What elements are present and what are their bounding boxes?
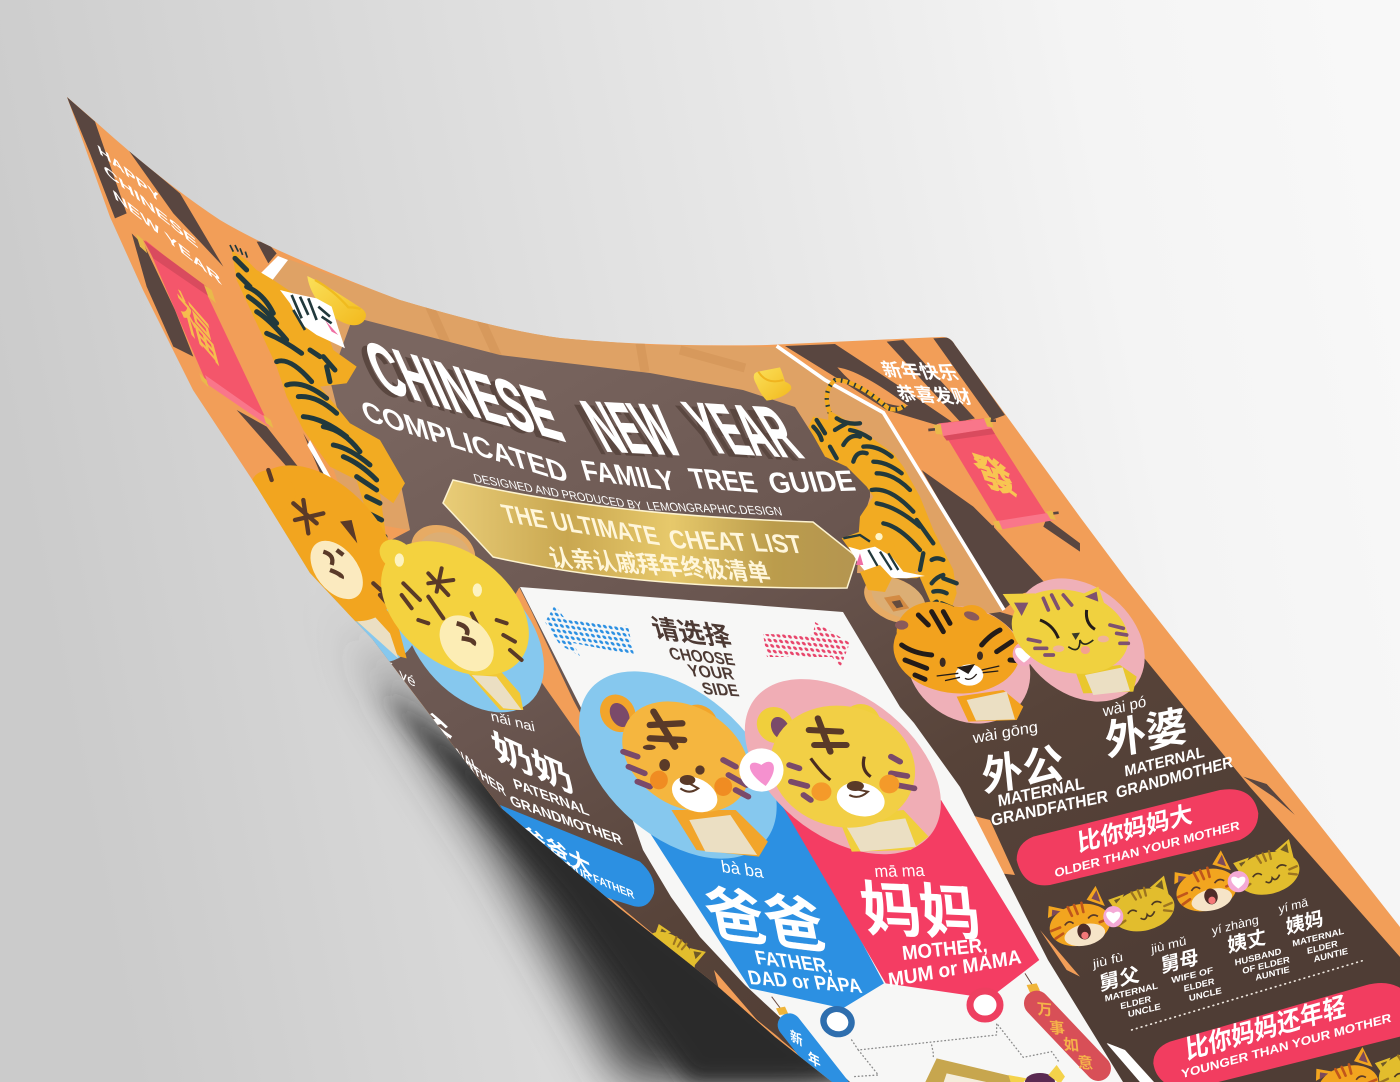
pill: older than your mother [1017, 789, 1258, 885]
small cat bottom left [636, 917, 708, 988]
red lantern: 意 [1077, 1052, 1094, 1073]
dotted connectors [852, 1023, 1060, 1077]
left tiger climbing [230, 245, 405, 553]
paternal grandmother text: 奶奶 [487, 726, 579, 803]
relative labels: AUNTIE [1313, 946, 1349, 964]
tiger face [842, 530, 925, 578]
centre white panel [520, 587, 1123, 1082]
red lantern [1025, 973, 1098, 1073]
wood frame panel [273, 258, 1002, 614]
title: YEAR [665, 390, 808, 476]
relative labels: 姨丈 [1227, 925, 1267, 958]
mother label: mā ma [874, 861, 926, 881]
red scroll fu: 福 [173, 280, 223, 374]
mother label: MUM or MAMA [887, 946, 1023, 992]
happy chinese new year: NEW YEAR [111, 186, 224, 289]
gold photo frame [920, 1058, 1033, 1082]
relative labels: jiù fù [1091, 950, 1124, 972]
paternal grandmother text: GRANDMOTHER [508, 793, 624, 849]
tree connectors and lanterns [772, 973, 1150, 1082]
grandfather tiger [890, 601, 1024, 722]
paternal grandmother text: PATERNAL [511, 776, 591, 820]
right grandparents text: GRANDFATHER [990, 787, 1109, 830]
heart bubble [387, 595, 417, 629]
credit line [474, 474, 782, 516]
white streak [1107, 1043, 1150, 1082]
pill: younger than your mother: 比你妈妈还年轻 [1184, 991, 1347, 1065]
blue lantern: 年 [807, 1049, 821, 1071]
relative labels: yí zhàng [1211, 912, 1259, 938]
tail [827, 380, 905, 413]
banner chinese: 认亲认戚拜年终极清单 [546, 545, 774, 587]
happy chinese new year: CHINESE [101, 161, 200, 253]
parents flags [541, 637, 1039, 1039]
relative labels: AUNTIE [1255, 964, 1290, 983]
grandfather oval [910, 606, 1030, 724]
relative labels: MATERNAL [1104, 980, 1159, 1004]
white frame line [777, 346, 1004, 610]
greeting chinese: 恭喜发财 [893, 383, 975, 408]
pill: older than your mother: 比你妈妈大 [1076, 800, 1194, 858]
blue dotted arrow [545, 605, 634, 656]
relative labels: yí mā [1278, 895, 1309, 916]
heart [1228, 871, 1249, 892]
grandmother oval [374, 534, 572, 739]
gold ingot left [307, 276, 366, 325]
subtitle: TREE [685, 463, 761, 499]
credit line: LEMONGRAPHIC.DESIGN [645, 499, 784, 518]
pill: older than your father: 爸爸大 [522, 823, 595, 882]
paternal grandfather text [364, 653, 508, 800]
title: NEW [564, 390, 688, 474]
subtitle: COMPLICATED [358, 395, 572, 490]
right grandparents text: MATERNAL [997, 774, 1085, 811]
choose english: CHOOSE [666, 643, 737, 669]
relative labels: ELDER [1307, 938, 1339, 956]
right grandparents text: MATERNAL [1124, 744, 1206, 781]
paternal grandfather text: yé yé [378, 653, 416, 691]
father label: FATHER, [753, 947, 834, 978]
grandparents pair on the left [220, 437, 654, 907]
relative labels: MATERNAL [1292, 926, 1345, 949]
cat pairs [1043, 838, 1304, 952]
right grandparents text: GRANDMOTHER [1115, 753, 1234, 802]
mother oval [709, 645, 977, 889]
relative labels: HUSBAND [1234, 946, 1282, 968]
title: CHINESE [347, 327, 568, 460]
choose chinese: 请选择 [648, 614, 735, 652]
father label: bà ba [720, 856, 765, 882]
mother label [855, 861, 1023, 992]
right grandparents text: wài gōng [971, 719, 1039, 747]
pill: younger than your mother: YOUNGER THAN YOUR MOTHER [1181, 1011, 1392, 1081]
mother flag [775, 793, 1039, 998]
paternal grandfather text: 爷爷 [364, 672, 463, 766]
orange wedge left of centre panel [516, 588, 580, 738]
top right brown stripes [777, 337, 1080, 610]
gold coin right [864, 577, 925, 622]
heart bubble [1012, 644, 1034, 666]
pill: older than your mother: OLDER THAN YOUR MOTHER [1054, 818, 1240, 880]
relative labels: OF ELDER [1242, 954, 1291, 976]
relative labels: 姨妈 [1285, 907, 1324, 939]
right grandparents text: 外公 [980, 739, 1066, 801]
credit line: DESIGNED AND [472, 471, 561, 500]
white frame corner top left [261, 256, 288, 280]
happy chinese new year [95, 141, 224, 289]
relative labels: UNCLE [1128, 1001, 1161, 1019]
soft paper shadow [325, 590, 860, 1082]
credit line: PRODUCED BY [560, 487, 644, 513]
orange wedges right of centre panel [950, 777, 1295, 977]
father label: DAD or PAPA [746, 967, 865, 998]
gold banner [443, 480, 857, 588]
red scroll fu [136, 234, 273, 428]
banner english right: CHEAT LIST [665, 525, 806, 559]
white streak lower right [1107, 1043, 1154, 1082]
tiger face [280, 290, 345, 348]
banner english: THE ULTIMATE [498, 499, 663, 551]
purple head [1025, 1073, 1055, 1082]
blue lantern [772, 997, 848, 1082]
relative labels: 舅父 [1098, 964, 1141, 996]
father oval [541, 637, 814, 893]
red scroll fa [928, 417, 1059, 530]
grandfather oval [252, 483, 448, 690]
tiger head claw on coin [860, 565, 892, 592]
choose your side arrows and text [545, 605, 850, 700]
pink dotted arrow [763, 622, 850, 668]
title: CHINESE [353, 325, 574, 458]
left brown background stripes [67, 97, 331, 478]
greeting chinese: 新年快乐 [878, 359, 962, 385]
coin [403, 515, 484, 588]
paternal grandmother text: nǎi nai [489, 709, 536, 736]
subtitle: FAMILY [577, 455, 679, 498]
paternal grandfather text: GRANDFATHER [412, 720, 508, 800]
red lantern: 如 [1063, 1035, 1080, 1055]
pill: older than your father [500, 805, 654, 907]
right grandparents text: wài pó [1101, 693, 1147, 721]
relative labels: ELDER [1120, 994, 1152, 1011]
grandparents pair on the right [893, 578, 1145, 724]
your: YOUR [685, 660, 737, 684]
red lantern: 万 [1036, 1001, 1053, 1020]
mother label: 妈妈 [855, 876, 987, 948]
heart [1103, 906, 1123, 927]
right grandparents text: 外婆 [1103, 702, 1189, 765]
right grandparents text [971, 693, 1234, 830]
title: NEW [570, 387, 694, 471]
orange wedge bottom left [714, 970, 782, 1040]
red lantern: 事 [1048, 1018, 1066, 1038]
grandmother tiger [1002, 577, 1138, 695]
father flag [618, 783, 884, 1008]
title: YEAR [671, 387, 814, 473]
right tiger climbing [808, 380, 957, 608]
subtitle [362, 402, 856, 493]
grandfather tiger [220, 437, 427, 658]
pill: older than your father: YOUR FATHER [559, 858, 636, 902]
heart bubble [739, 748, 784, 792]
blue lantern: 新 [789, 1027, 804, 1049]
relative labels: ELDER [1183, 976, 1215, 994]
gold ingot right [754, 367, 791, 401]
relative labels: jiù mǔ [1149, 934, 1187, 957]
pill: younger than your mother [1153, 983, 1400, 1082]
mother tiger [751, 687, 934, 852]
relative labels: 舅母 [1160, 947, 1199, 978]
grandmother oval [1026, 578, 1145, 702]
red ring [970, 991, 1000, 1019]
blue ring [819, 1004, 856, 1039]
paternal grandfather text: PATERNAL [419, 720, 481, 777]
greeting chinese [880, 360, 971, 405]
side: SIDE [699, 678, 741, 700]
grandmother tiger [355, 514, 554, 710]
subtitle: GUIDE [764, 465, 859, 500]
father label: 爸爸 [699, 880, 831, 961]
father tiger [594, 679, 772, 857]
father label [699, 856, 865, 998]
relative labels [1091, 895, 1365, 1030]
main brown panel [330, 317, 1400, 1082]
title [362, 342, 806, 461]
relative labels: WIFE OF [1171, 965, 1214, 985]
relative labels: UNCLE [1189, 985, 1222, 1003]
red scroll fa: 發 [966, 449, 1024, 504]
mother label: MOTHER, [901, 935, 989, 965]
happy chinese new year: HAPPY [95, 141, 163, 207]
paternal grandmother text [487, 709, 624, 849]
